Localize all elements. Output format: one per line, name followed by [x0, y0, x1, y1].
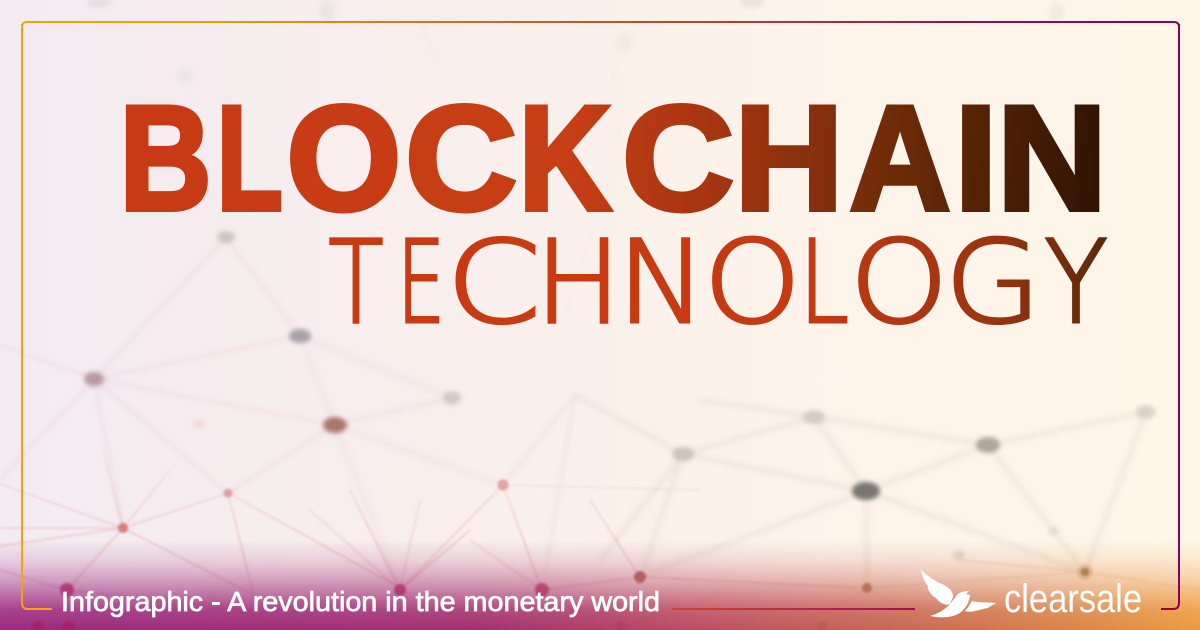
- bottom colour gradient band: [0, 546, 1200, 630]
- subtitle: TECHNOLOGY: G: [945, 216, 1041, 349]
- subtitle: TECHNOLOGY: [328, 216, 1107, 349]
- title: BLOCKCHAIN: O: [286, 74, 401, 242]
- subtitle: TECHNOLOGY: Y: [1045, 216, 1107, 349]
- title: BLOCKCHAIN: C: [405, 74, 517, 242]
- subtitle: TECHNOLOGY: N: [617, 216, 707, 349]
- subtitle: TECHNOLOGY: O: [704, 216, 801, 349]
- title: BLOCKCHAIN: A: [850, 74, 950, 242]
- subtitle: TECHNOLOGY: E: [397, 216, 445, 349]
- title: BLOCKCHAIN: C: [622, 74, 734, 242]
- caption: Infographic - A revolution in the monetary world: [61, 586, 660, 617]
- subtitle: TECHNOLOGY: H: [535, 216, 621, 349]
- title: BLOCKCHAIN: K: [519, 74, 611, 242]
- subtitle: TECHNOLOGY: O: [850, 216, 948, 349]
- subtitle: TECHNOLOGY: L: [799, 216, 849, 349]
- title: BLOCKCHAIN: B: [120, 74, 212, 242]
- title: BLOCKCHAIN: L: [217, 74, 283, 242]
- bottom nodes: [32, 621, 827, 630]
- logo wordmark: clearsale: [1004, 577, 1142, 621]
- subtitle: TECHNOLOGY: T: [328, 216, 384, 349]
- title: BLOCKCHAIN: H: [734, 74, 844, 242]
- icon: ClearSale bird logo: [921, 569, 996, 617]
- title: BLOCKCHAIN: I: [954, 74, 998, 242]
- title: BLOCKCHAIN: [120, 74, 1107, 242]
- title: BLOCKCHAIN: N: [997, 74, 1107, 242]
- subtitle: TECHNOLOGY: C: [446, 216, 541, 349]
